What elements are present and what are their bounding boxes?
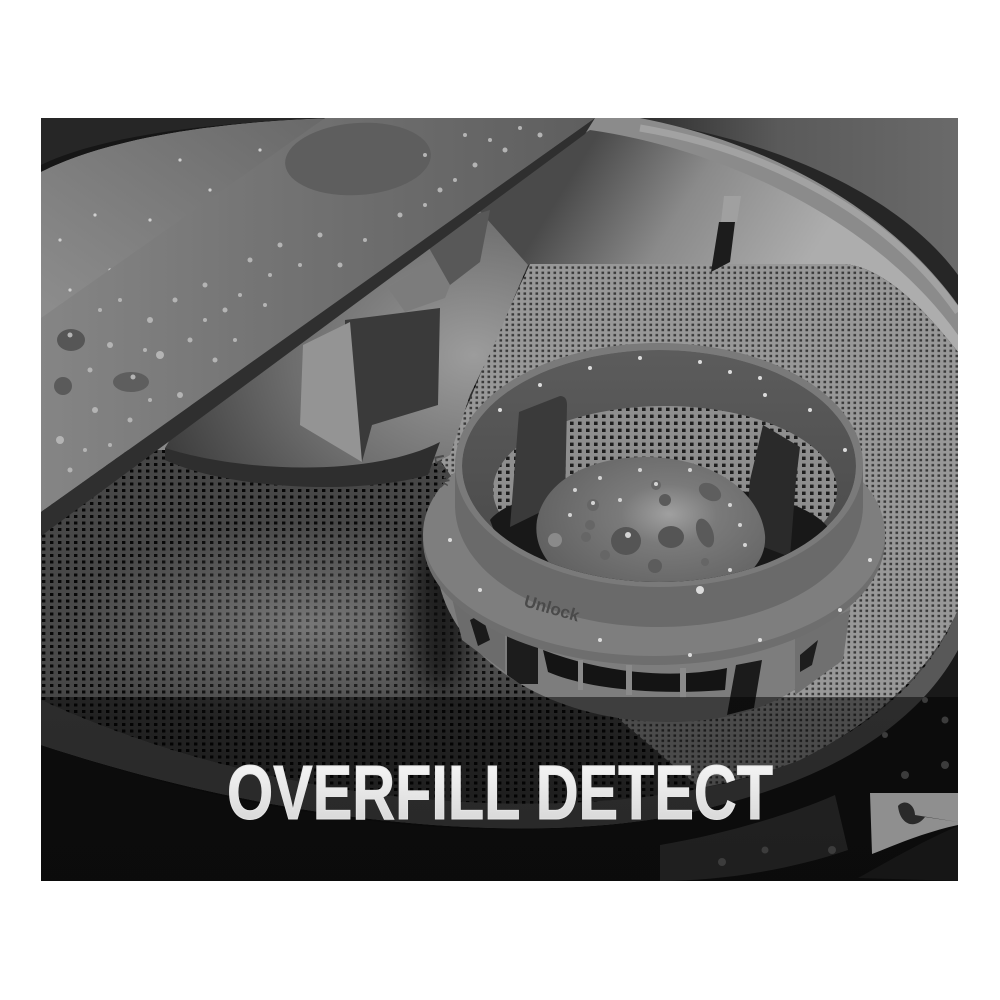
lower rim shade xyxy=(41,610,958,828)
right mesh filter xyxy=(440,264,958,788)
ring interior xyxy=(462,350,856,600)
ring text: Unlock xyxy=(522,592,582,626)
back wall xyxy=(462,350,856,528)
shadow around strainer xyxy=(408,525,472,695)
ring text xyxy=(431,453,582,626)
light rim band xyxy=(41,118,958,828)
upper ring top edge xyxy=(455,343,863,587)
spray arm xyxy=(41,118,595,536)
lower mesh filter xyxy=(41,264,958,804)
tub floor bottom xyxy=(41,620,958,881)
lit mesh patch xyxy=(106,534,493,700)
lower locking ring xyxy=(423,472,885,665)
upper ring outer wall xyxy=(455,465,863,627)
title: OVERFILL DETECT xyxy=(227,750,773,836)
corner tag bottom right xyxy=(870,793,958,854)
dark cavity around cap xyxy=(490,491,828,582)
photo: dishwasher filter xyxy=(41,118,958,881)
domed cap xyxy=(536,457,766,582)
dark corner xyxy=(41,118,330,165)
rim highlight xyxy=(640,128,958,312)
left post xyxy=(510,396,567,527)
floor panel bottom right xyxy=(660,795,848,881)
dome droplets xyxy=(548,468,747,573)
water droplets on arm xyxy=(54,126,542,472)
mesh shading bands xyxy=(41,264,958,804)
bottom banner overlay xyxy=(41,697,958,881)
spray arm support column xyxy=(300,210,490,462)
infographic canvas xyxy=(41,118,958,881)
smooth tray surface xyxy=(474,130,958,352)
spray arm hub xyxy=(285,123,431,196)
strainer cage below rings xyxy=(440,587,850,722)
bowl under spray arm xyxy=(165,200,528,482)
upright tab xyxy=(711,196,741,272)
dark lower rim bottom right xyxy=(858,826,958,881)
right post xyxy=(745,425,800,557)
tray droplets upper left xyxy=(41,118,324,292)
tub wall top right xyxy=(641,118,958,275)
dark channel beside rim xyxy=(684,128,958,305)
ring text: Lock xyxy=(431,453,454,489)
inner strainer mesh xyxy=(493,406,837,522)
bottom droplets xyxy=(718,697,949,866)
ring droplets xyxy=(448,356,872,657)
dark collar under bowl xyxy=(165,442,440,487)
upper left tray xyxy=(41,118,324,260)
photo backdrop xyxy=(41,118,723,830)
